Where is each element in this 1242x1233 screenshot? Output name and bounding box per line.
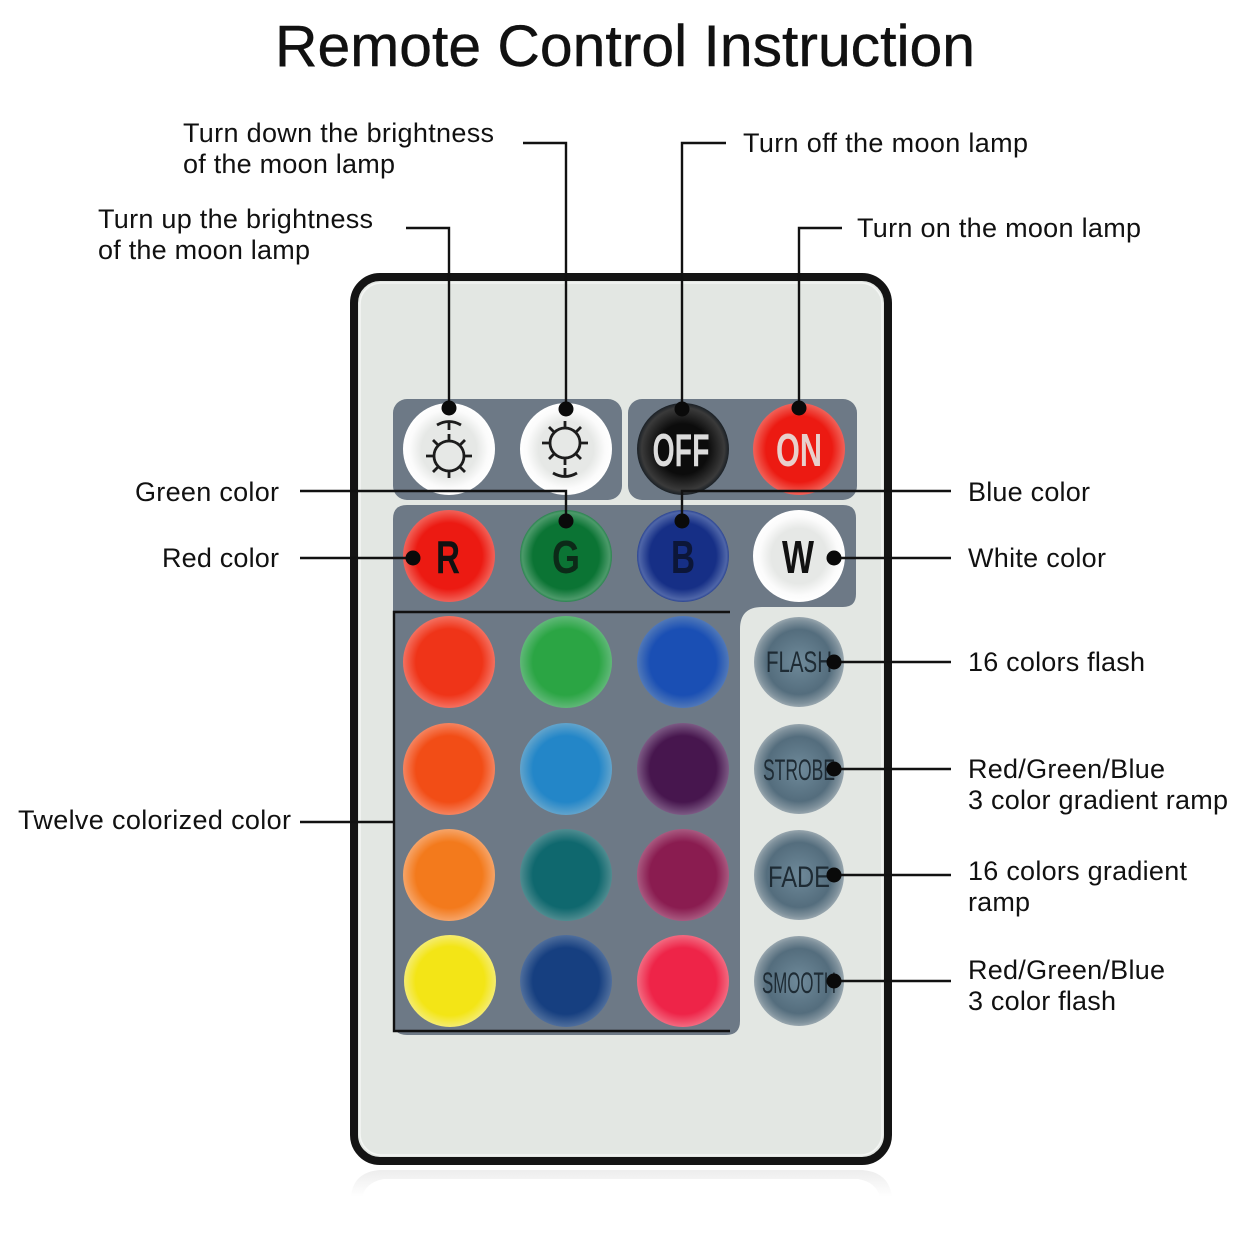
button: brightness up [403,403,495,495]
button: fade [754,830,844,920]
callout: 16 colors gradient ramp [826,856,1187,917]
button: on: ON [776,424,822,476]
callout: turn down the brightness: Turn down the brightness [183,118,494,148]
callout: 16 colors flash [826,647,1145,677]
button: flash [754,617,844,707]
callout: turn up the brightness: of the moon lamp [98,235,310,265]
callout: turn on [792,213,1141,416]
callout: 3 color flash [826,955,1165,1016]
button: R: R [436,531,460,583]
button: W: W [782,531,814,583]
button: on [753,403,845,495]
callout: turn off [674,128,1028,416]
button: flash: FLASH [766,646,832,679]
button: B [637,510,729,602]
callout: red color [162,543,420,573]
button: off [637,403,729,495]
button: G: G [552,531,580,583]
button: smooth: SMOOTH [762,967,836,1000]
callout: gradient ramp [826,754,1228,815]
callout: turn down the brightness [183,118,574,416]
callout: turn off: Turn off the moon lamp [743,128,1028,158]
colour button panel [393,505,856,1035]
button: smooth [754,936,844,1026]
callout: gradient ramp: Red/Green/Blue [968,754,1165,784]
button: strobe [754,724,844,814]
callout: 3 color flash: Red/Green/Blue [968,955,1165,985]
callout: white color [826,543,1106,573]
callout: 16 colors gradient ramp: ramp [968,887,1030,917]
remote body [354,277,888,1161]
button: B: B [671,531,695,583]
callout: green color: Green color [135,477,279,507]
callout: blue color: Blue color [968,477,1090,507]
callout: gradient ramp: 3 color gradient ramp [968,785,1228,815]
callout: green color [135,477,574,528]
remote reflection [351,1170,892,1197]
callout: twelve colorized color: Twelve colorized color [18,805,291,835]
button: off: OFF [652,424,710,476]
top right button panel [628,399,857,500]
remote control [351,277,892,1197]
callout: 16 colors flash: 16 colors flash [968,647,1145,677]
button: R [403,510,495,602]
button: fade: FADE [768,861,830,894]
callout: turn on: Turn on the moon lamp [857,213,1141,243]
top left button panel [393,399,622,500]
callout: 16 colors gradient ramp: 16 colors gradient [968,856,1187,886]
callout: turn down the brightness: of the moon lamp [183,149,395,179]
callout: white color: White color [968,543,1106,573]
twelve colour buttons [403,616,729,1027]
button: strobe: STROBE [763,754,835,787]
button: brightness down [520,403,612,495]
title: Remote Control Instruction [275,14,975,79]
button: G [520,510,612,602]
callout: turn up the brightness [98,204,456,416]
callout: twelve colorized color [18,612,730,1031]
callout: red color: Red color [162,543,279,573]
callout: turn up the brightness: Turn up the brightness [98,204,373,234]
callout: blue color [674,477,1090,528]
button: W [753,510,845,602]
callout: 3 color flash: 3 color flash [968,986,1116,1016]
